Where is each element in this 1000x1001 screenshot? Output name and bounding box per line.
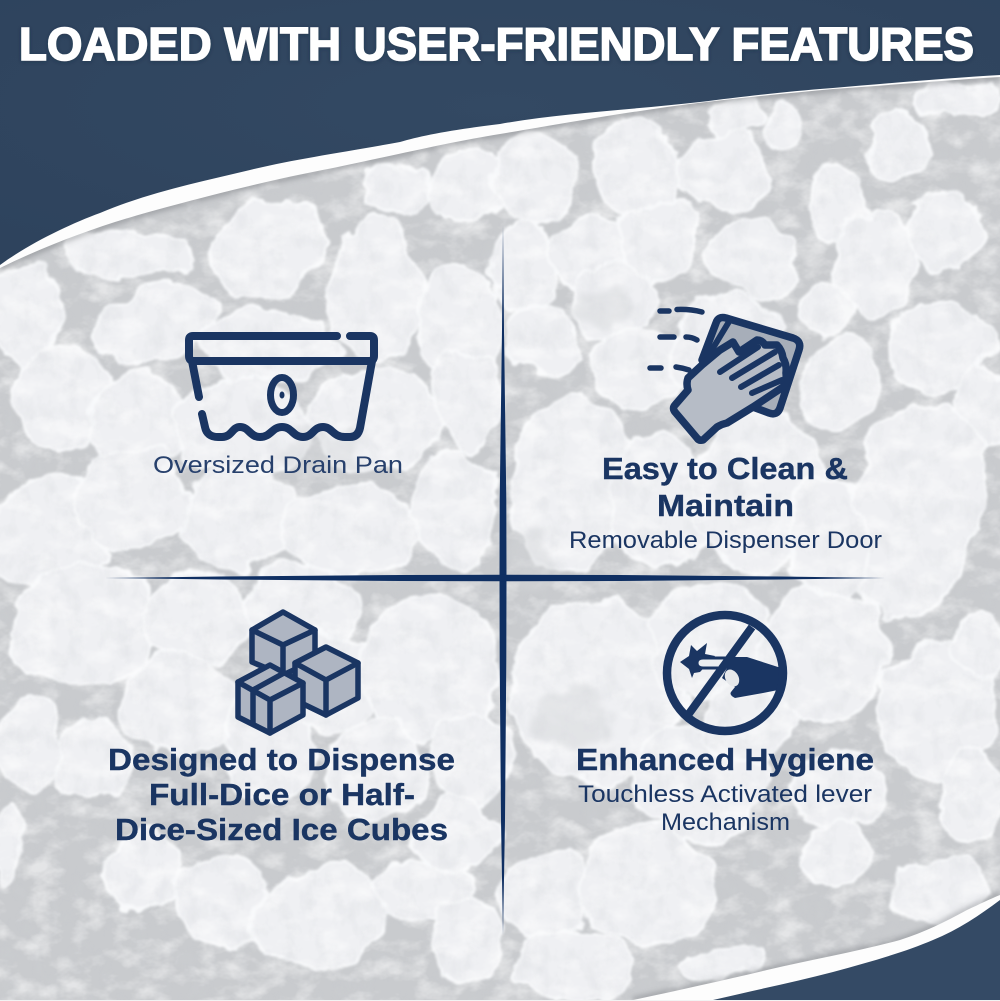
divider: horizontal [105, 575, 885, 581]
label line two: Mechanism [661, 809, 790, 836]
footer corner with swoosh [0, 895, 1000, 1001]
heading line three: Dice-Sized Ice Cubes [115, 812, 448, 847]
icon: ice cubes [238, 612, 358, 733]
heading: designed to dispense: Designed to Dispense [108, 742, 455, 777]
heading: enhanced hygiene: Enhanced Hygiene [576, 742, 874, 777]
panel: enhanced hygiene [576, 615, 874, 836]
heading: easy to clean and maintain: Easy to Clean & [602, 451, 848, 486]
panel: oversized drain pan [153, 336, 403, 479]
label: oversized drain pan: Oversized Drain Pan [153, 452, 403, 479]
heading line two: Maintain [657, 488, 794, 523]
divider: vertical [500, 225, 506, 935]
label: touchless activated lever: Touchless Activated lever [578, 781, 872, 808]
title: LOADED WITH USER-FRIENDLY FEATURES [19, 18, 974, 70]
panel: ice cube sizes [108, 612, 455, 847]
label: removable dispenser door: Removable Dispenser Door [569, 527, 882, 554]
icon: no touch [667, 615, 790, 731]
panel: easy to clean and maintain [569, 309, 882, 554]
heading line two: Full-Dice or Half- [149, 777, 415, 812]
icon: hand wiping with cloth [650, 309, 800, 440]
icon: drain pan [189, 336, 374, 437]
header band with swoosh [0, 0, 1000, 268]
